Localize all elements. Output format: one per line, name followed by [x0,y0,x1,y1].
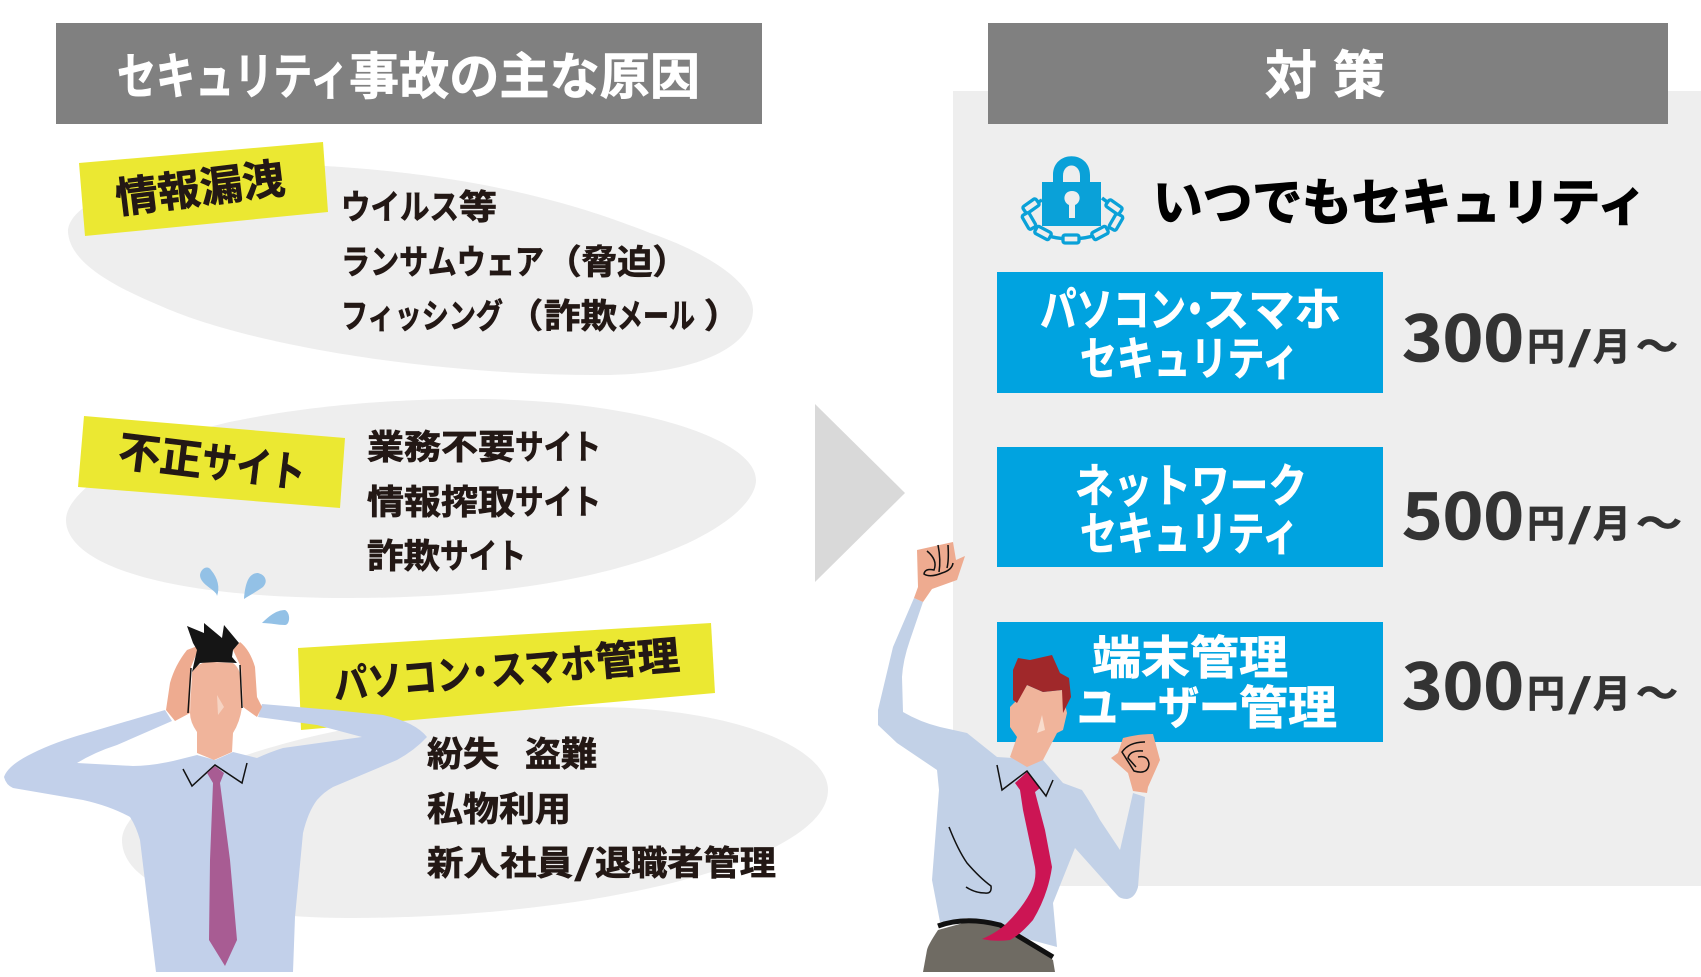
price: 300: 円 [1527,316,1565,371]
heading: countermeasures: 策 [1333,34,1385,109]
price: 300: 月 [1593,316,1631,371]
heading: countermeasures [988,23,1668,124]
list [341,180,740,338]
collar [997,765,1053,796]
price: 300: 円 [1527,663,1565,718]
tag label: スマホ [487,630,598,697]
panel: malicious sites [66,399,756,598]
service: PC and smartphone security: ・ [1177,274,1213,340]
shirt [878,598,1145,947]
trousers [923,922,1055,972]
neck and face [1010,685,1067,767]
service: network security: ネットワーク [1075,450,1307,516]
list: フィッシング [341,289,503,338]
list: サイト [515,420,601,469]
list: サイト [440,529,526,578]
tie [982,772,1052,941]
list: ウイルス [341,180,459,229]
service: device and user management: 端末管理 [1092,622,1288,688]
heading: countermeasures: 対 [1265,34,1317,109]
blob [68,165,753,375]
heading: causes: セキュリティ [117,37,349,109]
shirt crease [949,827,991,893]
face outline [188,665,242,713]
service: PC and smartphone security: セキュリティ [1080,323,1299,389]
price: 500: / [1568,493,1592,548]
price: 300 [1402,637,1678,728]
arrow [815,404,905,582]
tag label: 情報漏洩 [112,145,288,226]
heading: causes: 事故の主な原因 [349,37,700,109]
blob [66,399,756,598]
chain strand [1025,198,1119,239]
lower fist [1111,734,1160,793]
list [367,420,601,578]
panel: information leak [68,142,753,375]
belt [938,921,1053,957]
price: 300: 300 [1402,289,1524,380]
face highlight [1037,715,1045,733]
tag label: 管理 [593,623,682,688]
keyhole [1064,191,1080,218]
service: device and user management [997,622,1383,742]
raised fist [914,542,965,602]
list: ） [704,289,740,338]
hair [1013,655,1071,713]
hand right [233,642,262,717]
tag label [331,623,682,711]
yellow tag [79,142,328,236]
panel: countermeasures background [953,91,1701,886]
shackle [1053,156,1090,184]
price: 300: ～ [1636,663,1678,718]
list: ランサムウェア [341,235,544,284]
list: サイト [515,475,601,524]
list [427,727,776,885]
tag label: ・ [461,639,498,700]
panel: PC and smartphone management [122,623,828,918]
list: / [574,836,595,885]
list: 新入社員 [427,836,573,885]
illustration: worried man [4,568,427,972]
service: device and user management: ユーザー [1077,672,1240,738]
list: 盗難 [525,727,597,776]
hand left [166,645,200,721]
shirt [4,704,427,972]
service: network security: セキュリティ [1080,498,1299,564]
blob [122,707,828,918]
list: 私物利用 [427,782,571,831]
price: 300: / [1568,663,1592,718]
price: 500: 円 [1527,493,1565,548]
service: PC and smartphone security [997,272,1383,393]
service: PC and smartphone security: スマホ [1203,274,1341,340]
illustration: cheering man [878,542,1160,972]
tag label [115,418,309,501]
tag label: サイト [199,428,309,501]
sweat drops [200,568,289,625]
list: 業務不要 [367,420,515,469]
list: 紛失 [427,727,499,776]
yellow tag [78,416,345,508]
service name: いつでもセキュリティ [1153,163,1647,235]
service: PC and smartphone security: パソコン [1040,274,1186,340]
hair [187,623,239,672]
tie [207,766,237,966]
list: 詐欺 [367,529,440,578]
price: 300 [1402,289,1678,380]
list: メール [617,289,695,338]
list: 詐欺 [544,289,617,338]
list: 情報搾取 [367,475,515,524]
icon: padlock with chain [1022,156,1123,243]
list: 等 [459,180,497,229]
price: 500: ～ [1636,493,1682,548]
face highlight [217,695,224,715]
list: （ [508,289,543,338]
price: 500: 月 [1593,493,1631,548]
service: device and user management: 管理 [1239,672,1337,738]
price: 300: ～ [1636,316,1678,371]
collar [183,763,247,786]
price: 300: 300 [1402,637,1524,728]
price: 500 [1402,467,1682,558]
list: 退職者管理 [595,836,776,885]
price: 500: 500 [1402,467,1524,558]
yellow tag [298,623,715,730]
service: network security [997,447,1383,567]
price: 300: / [1568,316,1592,371]
chain links [1022,198,1123,243]
tag label: パソコン [331,641,473,711]
heading: causes [56,23,762,124]
tag label: 不正 [115,418,206,489]
list: （脅迫） [546,235,688,284]
lock body [1042,182,1101,226]
price: 300: 月 [1593,663,1631,718]
neck and face [190,662,242,760]
